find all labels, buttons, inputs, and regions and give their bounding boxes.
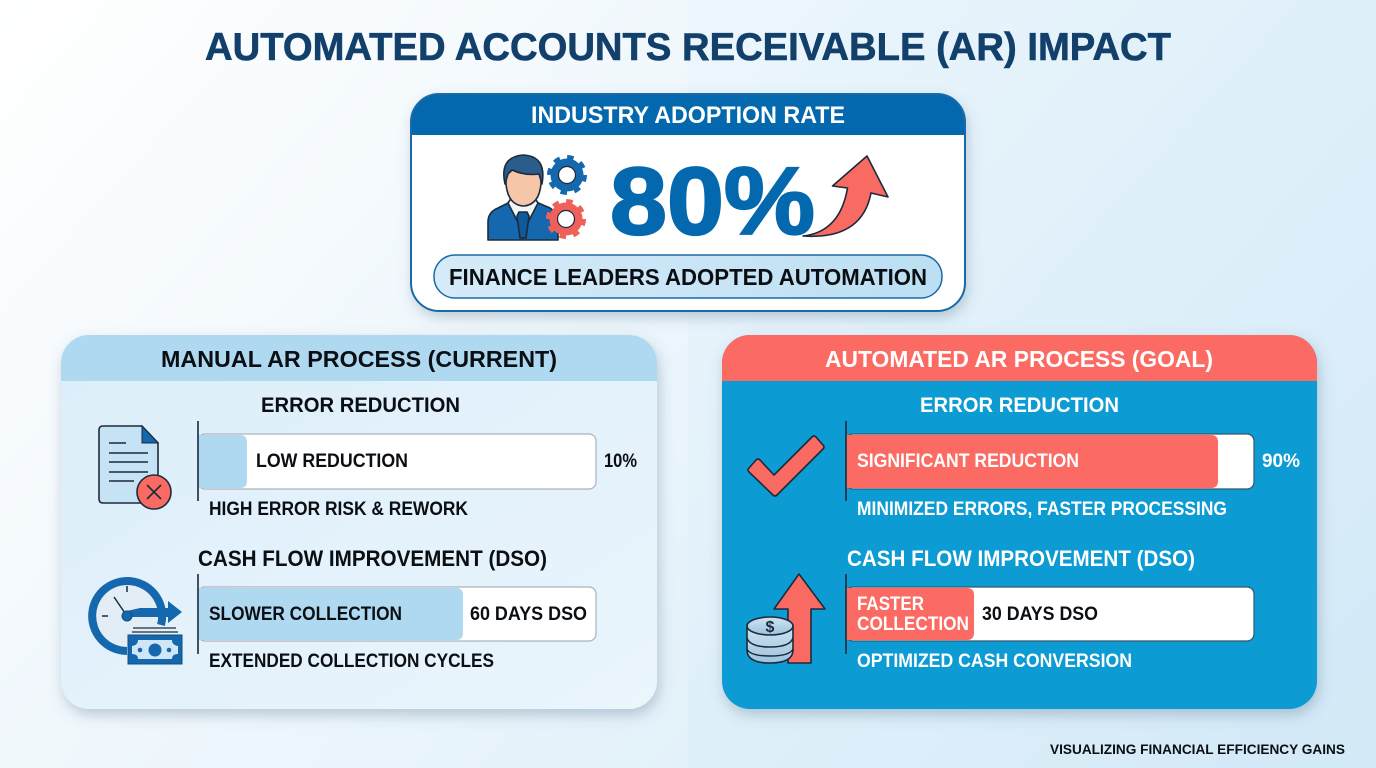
bar: significant reduction 90% bbox=[846, 421, 1254, 501]
pill: finance leaders adopted automation bbox=[434, 255, 942, 298]
heading: error reduction: ERROR REDUCTION bbox=[261, 394, 460, 417]
note: extended collection cycles: EXTENDED COLLECTION CYCLES bbox=[209, 651, 494, 672]
panel: industry adoption rate bbox=[411, 94, 965, 311]
panel header: manual bbox=[61, 335, 657, 381]
heading: automated AR process: AUTOMATED AR PROCESS (GOAL) bbox=[825, 346, 1213, 372]
icon: blue gear bbox=[549, 157, 585, 193]
heading: industry adoption rate: INDUSTRY ADOPTION RATE bbox=[531, 102, 845, 129]
note: minimized errors: MINIMIZED ERRORS, FASTER PROCESSING bbox=[857, 499, 1227, 520]
heading: manual AR process: MANUAL AR PROCESS (CURRENT) bbox=[161, 346, 557, 372]
title: AUTOMATED ACCOUNTS RECEIVABLE (AR) IMPACT bbox=[205, 26, 1171, 69]
heading: cash flow improvement: CASH FLOW IMPROVEMENT (DSO) bbox=[198, 546, 547, 571]
bar: faster collection 30 days DSO: FASTER bbox=[857, 594, 924, 615]
note: high error risk: HIGH ERROR RISK & REWORK bbox=[209, 499, 468, 520]
bar: low reduction 10% bbox=[198, 421, 596, 501]
pill: finance leaders adopted automation: FINANCE LEADERS ADOPTED AUTOMATION bbox=[449, 264, 927, 290]
icon: check mark bbox=[748, 436, 824, 496]
heading: error reduction: ERROR REDUCTION bbox=[920, 394, 1119, 417]
icon: red up arrow bbox=[803, 156, 888, 236]
panel: automated AR process bbox=[722, 335, 1317, 709]
panel header: automated bbox=[722, 335, 1317, 381]
panel: manual AR process bbox=[61, 335, 657, 709]
heading: cash flow improvement: CASH FLOW IMPROVEMENT (DSO) bbox=[847, 546, 1195, 571]
icon: red gear bbox=[548, 201, 584, 237]
bar: low reduction 10%: LOW REDUCTION bbox=[256, 451, 408, 472]
icon: document with error bbox=[99, 426, 171, 509]
bar: slower collection 60 days DSO bbox=[198, 574, 596, 654]
bar: faster collection 30 days DSO: 30 DAYS DSO bbox=[982, 604, 1098, 625]
bar: faster collection 30 days DSO bbox=[846, 574, 1254, 654]
big number: 80%: 80% bbox=[610, 148, 815, 255]
bar: faster collection 30 days DSO: COLLECTION bbox=[857, 614, 969, 635]
panel header: adoption bbox=[411, 94, 965, 135]
footer note: VISUALIZING FINANCIAL EFFICIENCY GAINS bbox=[1050, 742, 1345, 757]
bar: significant reduction 90%: SIGNIFICANT REDUCTION bbox=[857, 451, 1079, 472]
value: 10%: 10% bbox=[604, 451, 637, 472]
icon: business person with gears bbox=[488, 155, 585, 240]
icon: clock with money bbox=[92, 581, 182, 664]
icon: coins with up arrow bbox=[747, 574, 825, 663]
icon: coins with up arrow: $ bbox=[766, 619, 775, 636]
value: 90%: 90% bbox=[1262, 451, 1300, 472]
bar: slower collection 60 days DSO: 60 DAYS DSO bbox=[470, 604, 587, 625]
bar: slower collection 60 days DSO: SLOWER COLLECTION bbox=[209, 604, 402, 625]
note: optimized cash conversion: OPTIMIZED CASH CONVERSION bbox=[857, 651, 1132, 672]
